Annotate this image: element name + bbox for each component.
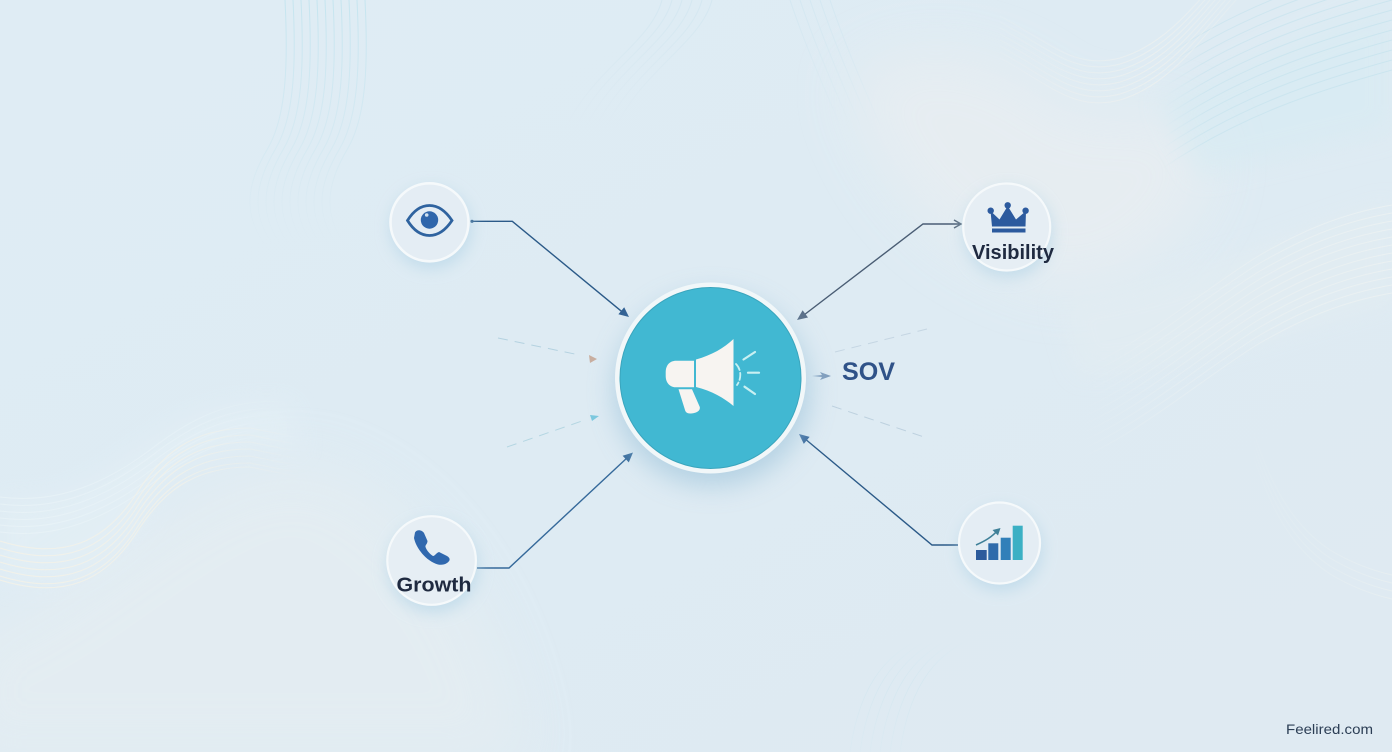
label: Growth: Growth	[396, 574, 472, 596]
connector: eye to centre	[470, 220, 629, 317]
connector: growth to centre	[477, 452, 633, 568]
watermark: Feelired.com	[1286, 721, 1373, 737]
dashed line: upper right	[835, 329, 927, 352]
central hub with megaphone	[614, 282, 810, 486]
dashed line: lower right	[832, 406, 924, 437]
connector: chart to centre	[799, 434, 958, 545]
icon: growth bars	[976, 526, 1023, 560]
small arrow toward SOV	[812, 372, 831, 380]
node: crown / Visibility	[963, 184, 1055, 277]
node: phone / Growth	[387, 516, 478, 612]
icon: crown	[988, 202, 1029, 232]
icon: eye	[408, 206, 452, 236]
label: Visibility: Visibility	[972, 242, 1055, 264]
icon: megaphone	[666, 339, 759, 414]
dashed arrow: lower left	[507, 415, 599, 447]
label: SOV: SOV	[842, 358, 895, 386]
node: bar chart	[959, 502, 1042, 590]
icon: phone	[414, 530, 450, 565]
dashed arrow: upper left	[498, 338, 597, 363]
connector: centre to crown	[797, 220, 961, 320]
node: eye	[390, 183, 471, 268]
